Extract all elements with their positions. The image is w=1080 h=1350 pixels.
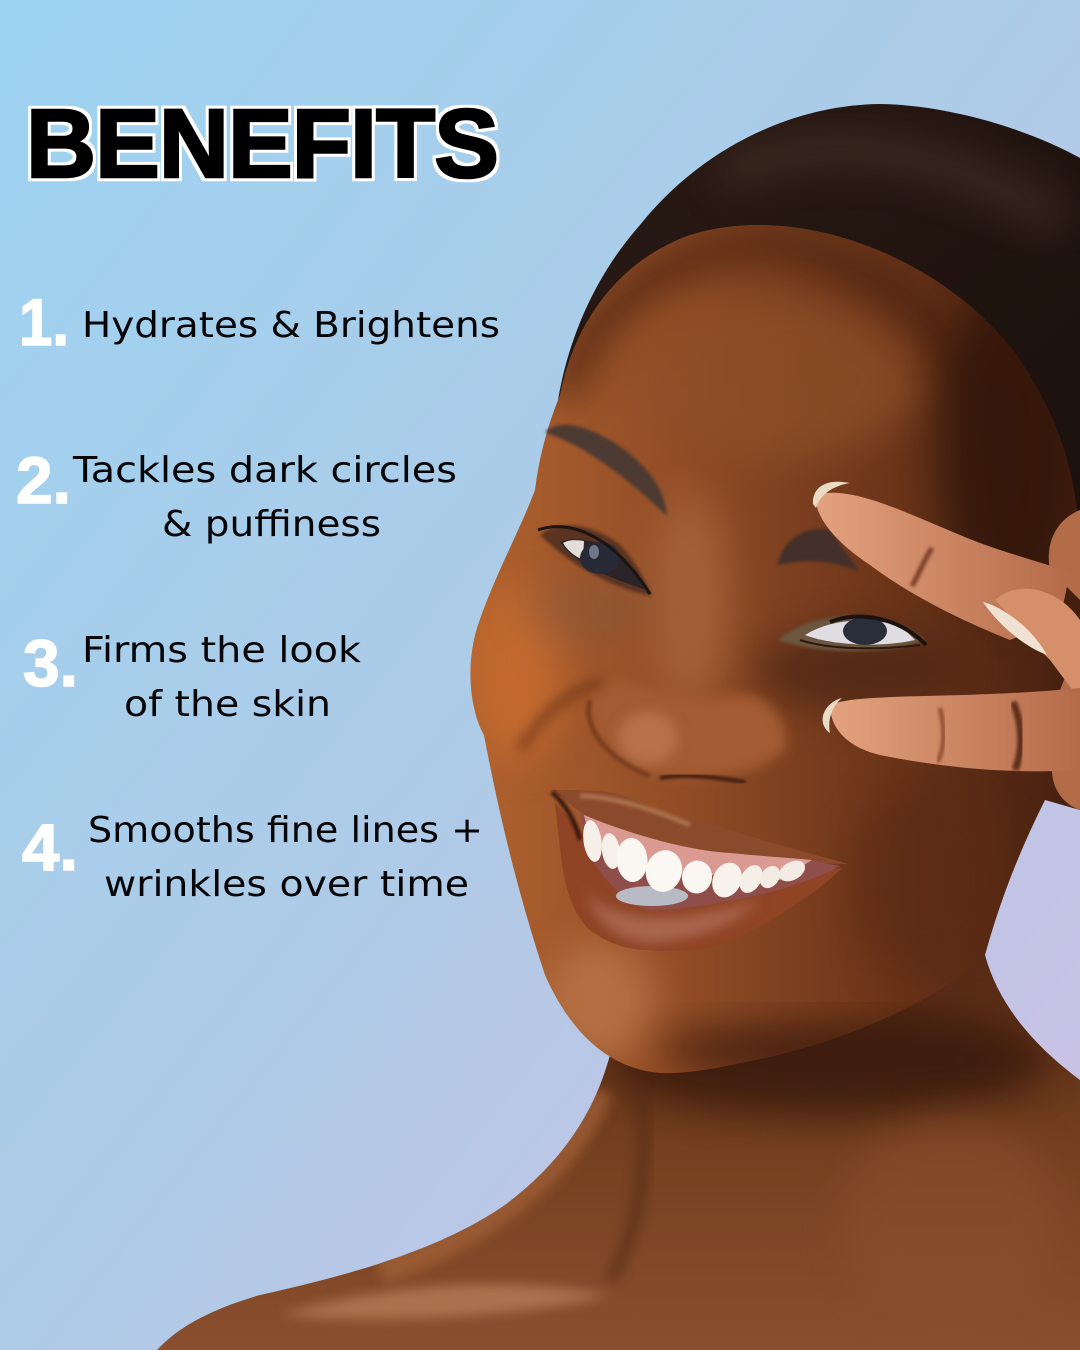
lower finger xyxy=(830,688,1080,771)
mouth interior xyxy=(580,813,840,910)
benefit 3: Firms the look xyxy=(82,630,361,671)
right eye xyxy=(778,616,926,651)
neck and shoulders xyxy=(157,955,1080,1350)
teeth xyxy=(581,819,809,906)
benefit 2: & puffiness xyxy=(162,504,381,545)
benefit 4: 4. xyxy=(22,810,78,884)
benefit 1 xyxy=(19,285,500,359)
hand: fingers over the eye xyxy=(813,482,1080,810)
benefit 2 xyxy=(16,443,457,545)
upper lip xyxy=(552,790,848,864)
benefit 3: 3. xyxy=(23,626,78,700)
benefit 3: of the skin xyxy=(124,684,331,725)
lower lip xyxy=(555,803,842,951)
right side of hand xyxy=(1049,510,1080,810)
left eyebrow xyxy=(545,425,667,516)
benefit 4 xyxy=(22,810,483,905)
illustration: smiling woman portrait xyxy=(157,104,1080,1350)
face shading xyxy=(554,225,950,416)
title: BENEFITS xyxy=(26,89,499,198)
middle finger with nail xyxy=(995,589,1080,700)
benefit 2: 2. xyxy=(16,443,71,517)
nose xyxy=(520,680,787,782)
benefit 2: Tackles dark circles xyxy=(72,450,457,491)
mouth xyxy=(552,790,848,951)
upper finger xyxy=(815,493,1070,640)
face xyxy=(470,225,1080,1074)
benefit 1: Hydrates & Brightens xyxy=(82,305,500,346)
hair xyxy=(558,104,1080,540)
benefit 1: 1. xyxy=(19,285,69,359)
right eyebrow xyxy=(778,529,860,572)
benefit 4: Smooths fine lines + xyxy=(88,810,483,851)
benefit 4: wrinkles over time xyxy=(104,864,469,905)
upper nail xyxy=(813,482,850,508)
benefit 3 xyxy=(23,626,361,725)
lower nail xyxy=(823,698,842,733)
left eye xyxy=(538,525,652,596)
